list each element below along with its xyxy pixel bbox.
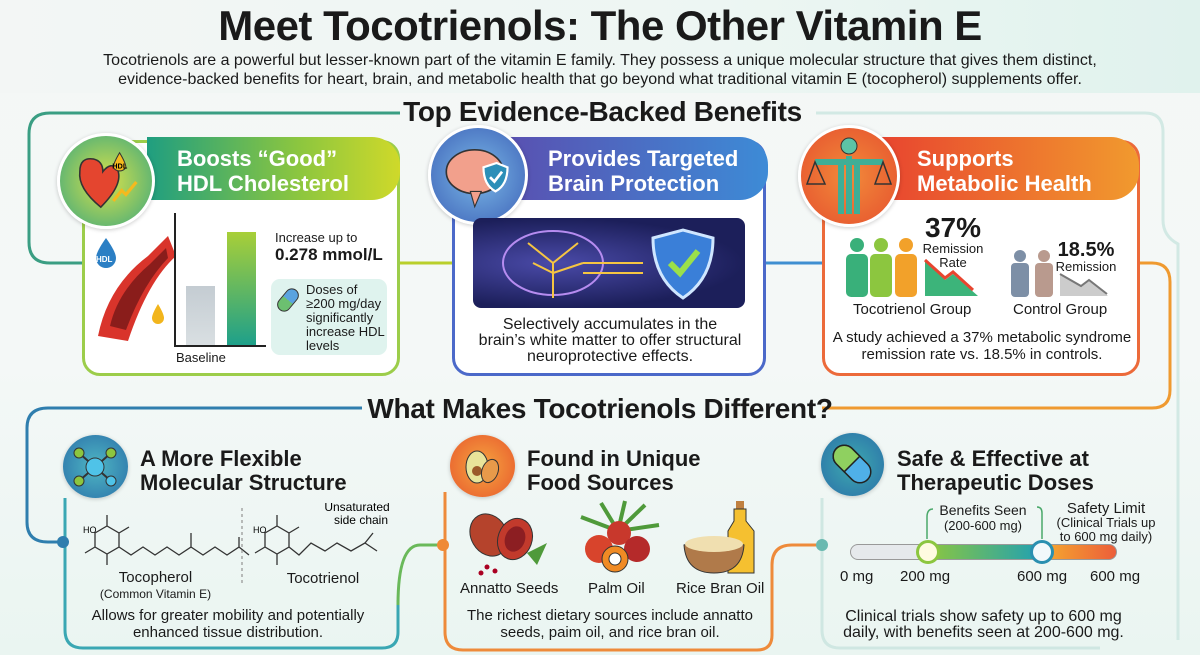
callout: doses: Doses of ≥200 mg/day significantly increase HDL levels: [306, 282, 385, 353]
stat: 37%: [923, 212, 983, 270]
band: brain title: [500, 137, 768, 200]
icon: brain: [428, 125, 528, 225]
icon: heart: HDL: [112, 161, 128, 170]
icon: heart: [57, 133, 155, 229]
labels: food names: Annatto Seeds: [460, 580, 558, 597]
label: safety limit: [1056, 500, 1155, 544]
panel: metabolic health: [822, 140, 1140, 376]
labels: dose ticks: 600 mg: [1090, 568, 1140, 585]
label: tocopherol: (Common Vitamin E): [100, 587, 211, 601]
band: HDL title: HDL Cholesterol: [177, 171, 349, 196]
text: food: [467, 607, 753, 641]
heading: top evidence-backed benefits: Top Evidence-Backed Benefits: [403, 96, 802, 127]
panel: safe doses: [819, 432, 1155, 641]
icon: palm fruit: [580, 500, 660, 572]
header background: [0, 0, 1200, 93]
title: molecular: Molecular Structure: [140, 470, 347, 495]
stat: increase: Increase up to: [275, 230, 357, 245]
stat: increase: [275, 230, 383, 264]
labels: food names: [460, 580, 764, 597]
bar: baseline: [186, 286, 215, 345]
labels: dose ticks: 0 mg: [840, 568, 873, 585]
labels: food names: Palm Oil: [588, 580, 645, 597]
panel: brain protection: [452, 140, 766, 376]
title: food: [527, 446, 701, 495]
subtitle: Tocotrienols are a powerful but lesser-known part of the vitamin E family. They possess a unique molecular structure that gives them distinct,: [103, 52, 1097, 69]
title: Meet Tocotrienols: The Other Vitamin E: [218, 2, 982, 49]
diagram: molecules: [83, 503, 390, 583]
band: brain title: Brain Protection: [548, 171, 719, 196]
label: benefits seen: Benefits Seen: [939, 502, 1027, 518]
icon: molecule: [63, 435, 128, 498]
icon: avocado: [450, 435, 515, 497]
diagram: molecules: HO: [83, 525, 96, 535]
label: tocopherol: [100, 569, 211, 601]
text: safe: [843, 608, 1124, 641]
label: safety limit: (Clinical Trials up: [1056, 515, 1155, 530]
icon: capsule: [821, 433, 884, 496]
band: metabolic title: [880, 137, 1139, 200]
label: benefits seen: [939, 502, 1027, 533]
icon: blood vessel: HDL: [96, 255, 113, 264]
bar chart: [174, 213, 266, 365]
icon: rice bran oil: [684, 501, 754, 574]
labels: dose ticks: 200 mg: [900, 568, 950, 585]
label: benefits seen: (200-600 mg): [944, 518, 1022, 533]
band: brain title: Provides Targeted: [548, 146, 738, 171]
band: HDL title: Boosts “Good”: [177, 146, 337, 171]
band: metabolic title: Metabolic Health: [917, 171, 1092, 196]
bar: dose gradient: [850, 544, 1117, 560]
band: metabolic title: Supports: [917, 146, 1014, 171]
text: food: The richest dietary sources include annatto: [467, 607, 753, 624]
callout: doses: [271, 279, 387, 355]
title: safe: Therapeutic Doses: [897, 470, 1094, 495]
label: safety limit: to 600 mg daily): [1060, 529, 1152, 544]
band: HDL title: [147, 137, 400, 200]
text: brain: brain’s white matter to offer structural: [479, 332, 741, 349]
stat: 18.5%: 18.5%: [1058, 239, 1114, 261]
diagram: molecules: side chain: [334, 513, 388, 527]
heading: what makes tocotrienols different: What Makes Tocotrienols Different?: [367, 393, 833, 424]
subtitle: [103, 52, 1097, 88]
title: food: Found in Unique: [527, 446, 701, 471]
icon: balance figure: [798, 125, 900, 227]
stat: 37%: 37%: [925, 212, 981, 243]
text: food: seeds, paim oil, and rice bran oil.: [500, 624, 720, 641]
labels: dose ticks: 600 mg: [1017, 568, 1067, 585]
label: tocopherol: Tocopherol: [119, 569, 192, 586]
text: brain: Selectively accumulates in the: [503, 316, 717, 333]
text: safe: daily, with benefits seen at 200-600 mg.: [843, 624, 1124, 641]
label: safety limit: Safety Limit: [1067, 500, 1145, 517]
label: tocotrienol group: Tocotrienol Group: [853, 301, 971, 318]
stat: 37%: Rate: [939, 255, 967, 270]
chart: tocotrienol group people: [846, 238, 978, 297]
panel: food sources: [448, 434, 764, 641]
text: safe: Clinical trials show safety up to 600 mg: [845, 608, 1122, 625]
text: brain: [479, 316, 741, 365]
title: molecular: [140, 446, 347, 495]
image: glowing brain and shield: [473, 218, 745, 308]
stat: 18.5%: Remission: [1056, 259, 1116, 274]
stat: 18.5%: [1056, 239, 1116, 274]
dose scale: [840, 500, 1155, 585]
title: molecular: A More Flexible: [140, 446, 302, 471]
title: safe: [897, 446, 1094, 495]
stat: 37%: Remission: [923, 241, 983, 256]
icon: blood vessel: [96, 236, 174, 341]
labels: food names: Rice Bran Oil: [676, 580, 764, 597]
icon: annatto seeds: [469, 513, 547, 576]
text: molecular: Allows for greater mobility and potentially enhanced tissue distribution.: [92, 607, 364, 641]
panel: molecular structure: [61, 434, 390, 641]
panel: HDL cholesterol: [82, 140, 400, 376]
stat: increase: 0.278 mmol/L: [275, 245, 383, 264]
label: control group: Control Group: [1013, 301, 1107, 318]
text: metabolic: A study achieved a 37% metabolic syndrome remission rate vs. 18.5% in controls.: [833, 329, 1131, 363]
title: food: Food Sources: [527, 470, 674, 495]
diagram: molecules: HO: [253, 525, 266, 535]
chart: control group people: [1011, 250, 1108, 297]
label: baseline: Baseline: [176, 350, 226, 365]
label: tocotrienol: Tocotrienol: [287, 570, 359, 587]
labels: dose ticks: [840, 568, 1140, 585]
title: safe: Safe & Effective at: [897, 446, 1089, 471]
text: brain: neuroprotective effects.: [527, 348, 693, 365]
subtitle: evidence-backed benefits for heart, brain, and metabolic health that go beyond what traditional vitamin E (tocopherol) supplements offer.: [118, 71, 1082, 88]
bar: increased: [227, 232, 256, 345]
